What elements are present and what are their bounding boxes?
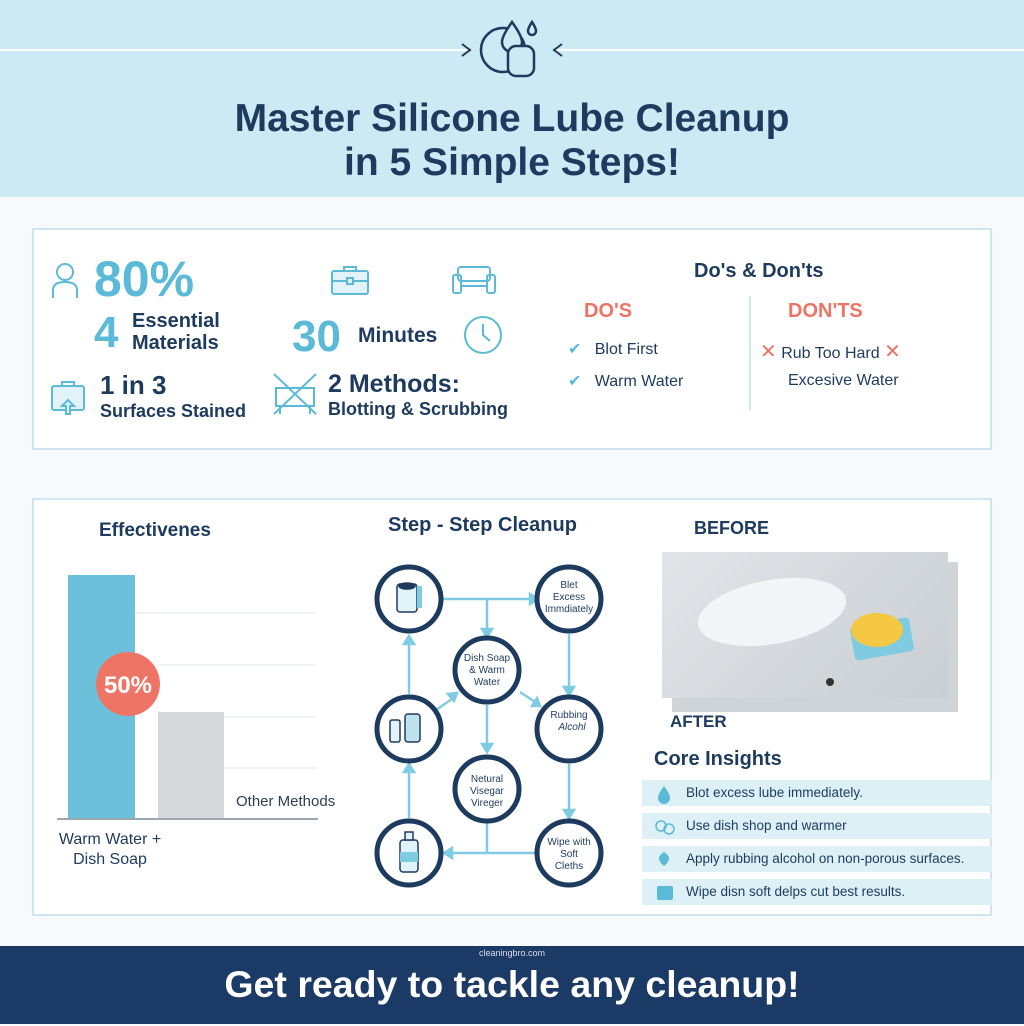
image: before/after (662, 518, 958, 731)
watermark: cleaningbro.com (479, 948, 545, 958)
title (235, 97, 789, 184)
chart: effectiveness (57, 520, 335, 868)
decorative lines with icon (0, 20, 1024, 78)
stat: 80%: 80% (94, 251, 194, 307)
flow diagram: step-step cleanup: Immdiately (545, 604, 593, 615)
list: insights: Use dish shop and warmer (686, 818, 847, 833)
list: don'ts: Excesive Water (788, 372, 899, 389)
flow diagram: step-step cleanup: Dish Soap (464, 653, 511, 664)
footer text: Get ready to tackle any cleanup! (224, 963, 800, 1005)
stat: 30 minutes: Minutes (358, 324, 437, 347)
list: insights (642, 780, 992, 905)
stat: 4 essential materials: Essential (132, 310, 220, 332)
flow diagram: step-step cleanup: Soft (560, 849, 578, 860)
icon: person (52, 263, 78, 298)
title: Master Silicone Lube Cleanup (235, 97, 789, 140)
list: don'ts (760, 300, 901, 389)
chart: effectiveness: 50% (104, 672, 152, 699)
icon: drop and sponge (481, 22, 536, 76)
flow diagram: step-step cleanup: Netural (471, 774, 503, 785)
chart: effectiveness: Effectivenes (99, 520, 211, 541)
image: before/after: BEFORE (694, 518, 769, 538)
flow diagram: step-step cleanup: Vireger (471, 798, 504, 809)
list: do's: ✔ Blot First (568, 341, 658, 358)
flow diagram: step-step cleanup: Step - Step Cleanup (388, 514, 577, 536)
title: in 5 Simple Steps! (344, 141, 680, 184)
list: do's (568, 300, 684, 390)
image: before/after: AFTER (670, 712, 727, 731)
list: insights: Apply rubbing alcohol on non-porous surfaces. (686, 851, 964, 866)
stat: 30 minutes: 30 (292, 312, 341, 361)
flow diagram: step-step cleanup: Excess (553, 592, 585, 603)
flow diagram: step-step cleanup: & Warm (469, 665, 505, 676)
list: insights: Blot excess lube immediately. (686, 785, 863, 800)
icon: sofa (452, 266, 496, 294)
chart: effectiveness: Other Methods (236, 793, 335, 810)
stat: 2 methods (328, 370, 508, 419)
chart: effectiveness: Dish Soap (73, 851, 147, 868)
list: insights: Wipe disn soft delps cut best results. (686, 884, 905, 899)
flow diagram: step-step cleanup: Cleths (555, 861, 583, 872)
flow diagram: step-step cleanup: Alcohl (557, 722, 586, 733)
stat: 4 essential materials: 4 (94, 308, 118, 357)
stat: 30 minutes (292, 312, 437, 361)
list: do's: DO'S (584, 300, 632, 322)
flow diagram: step-step cleanup: Visegar (470, 786, 505, 797)
list: don'ts: DON'TS (788, 300, 863, 322)
flow diagram: step-step cleanup: Water (474, 677, 501, 688)
flow diagram: step-step cleanup: Rubbing (550, 710, 588, 721)
icon: clock (464, 316, 502, 354)
flow diagram: step-step cleanup: Blet (560, 580, 578, 591)
stat: 1 in 3 (100, 370, 246, 421)
flow diagram: step-step cleanup (374, 514, 604, 888)
chart: effectiveness: Warm Water + (59, 831, 161, 848)
panel: main (32, 498, 992, 916)
heading: do's & don'ts: Do's & Don'ts (694, 260, 824, 282)
stat: 4 essential materials (94, 308, 220, 357)
icon: crossed chair (273, 373, 317, 415)
icon: briefcase (331, 266, 369, 295)
list: don'ts: ✕ Rub Too Hard ✕ (760, 341, 901, 363)
stat: 2 methods: 2 Methods: (328, 370, 460, 398)
icon: box with arrow (51, 381, 85, 415)
stat: 1 in 3: Surfaces Stained (100, 401, 246, 421)
panel: stats (32, 228, 992, 450)
stat: 2 methods: Blotting & Scrubbing (328, 399, 508, 419)
stat: 1 in 3: 1 in 3 (100, 370, 166, 400)
list: do's: ✔ Warm Water (568, 373, 683, 390)
header band (0, 0, 1024, 197)
footer band (0, 946, 1024, 1024)
flow diagram: step-step cleanup: Wipe with (547, 837, 591, 848)
heading: core insights: Core Insights (654, 748, 782, 770)
stat: 4 essential materials: Materials (132, 332, 219, 354)
